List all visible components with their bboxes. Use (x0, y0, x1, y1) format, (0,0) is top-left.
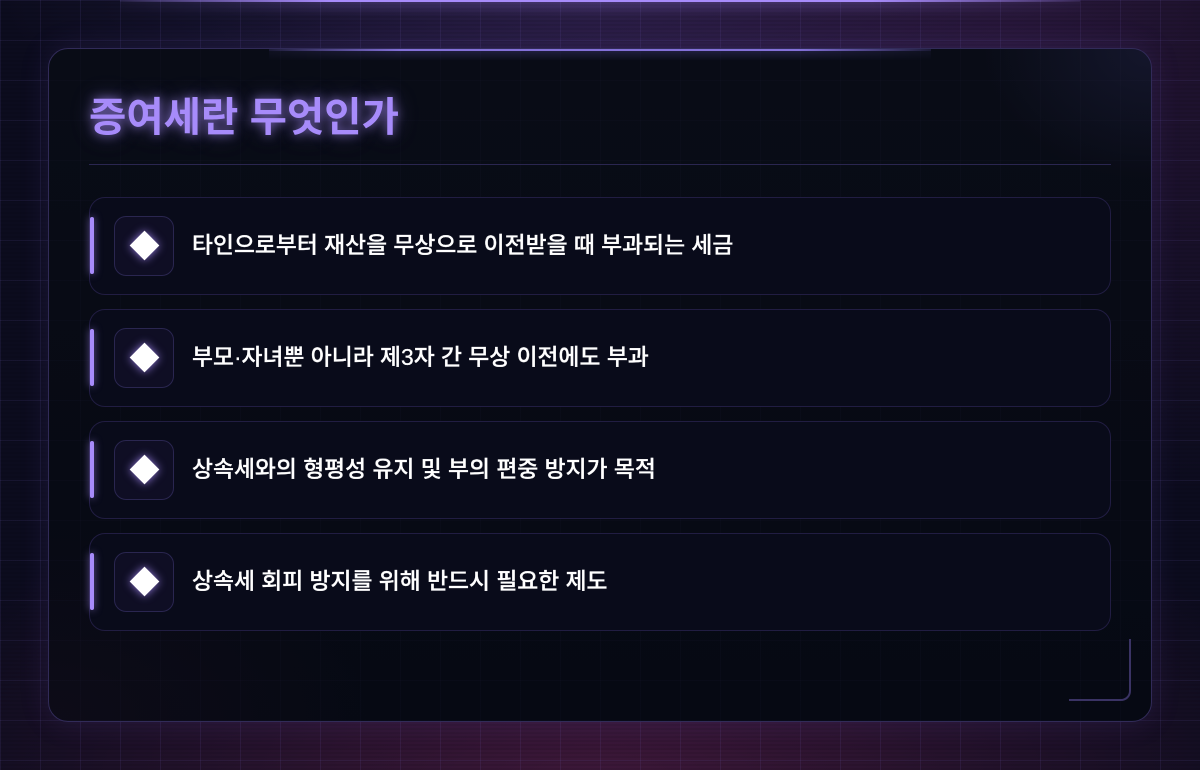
top glow (124, 0, 1068, 12)
panel top highlight (269, 49, 931, 51)
item text: 타인으로부터 재산을 무상으로 이전받을 때 부과되는 세금 (192, 232, 733, 258)
icon: diamond (114, 440, 174, 500)
accent bar (90, 217, 94, 274)
icon: diamond (114, 552, 174, 612)
icon: diamond (114, 216, 174, 276)
accent bar (90, 553, 94, 610)
item 2 (89, 309, 1111, 407)
item 3 (89, 421, 1111, 519)
top glow bar (120, 0, 1080, 2)
panel top glow (269, 49, 931, 59)
item 4 (89, 533, 1111, 631)
accent bar (90, 329, 94, 386)
corner bracket (1069, 639, 1131, 701)
title: 증여세란 무엇인가 (89, 94, 399, 140)
item text: 상속세와의 형평성 유지 및 부의 편중 방지가 목적 (192, 456, 656, 482)
icon: diamond (114, 328, 174, 388)
item text: 부모·자녀뿐 아니라 제3자 간 무상 이전에도 부과 (192, 344, 649, 370)
item 1 (89, 197, 1111, 295)
accent bar (90, 441, 94, 498)
item text: 상속세 회피 방지를 위해 반드시 필요한 제도 (192, 568, 608, 594)
